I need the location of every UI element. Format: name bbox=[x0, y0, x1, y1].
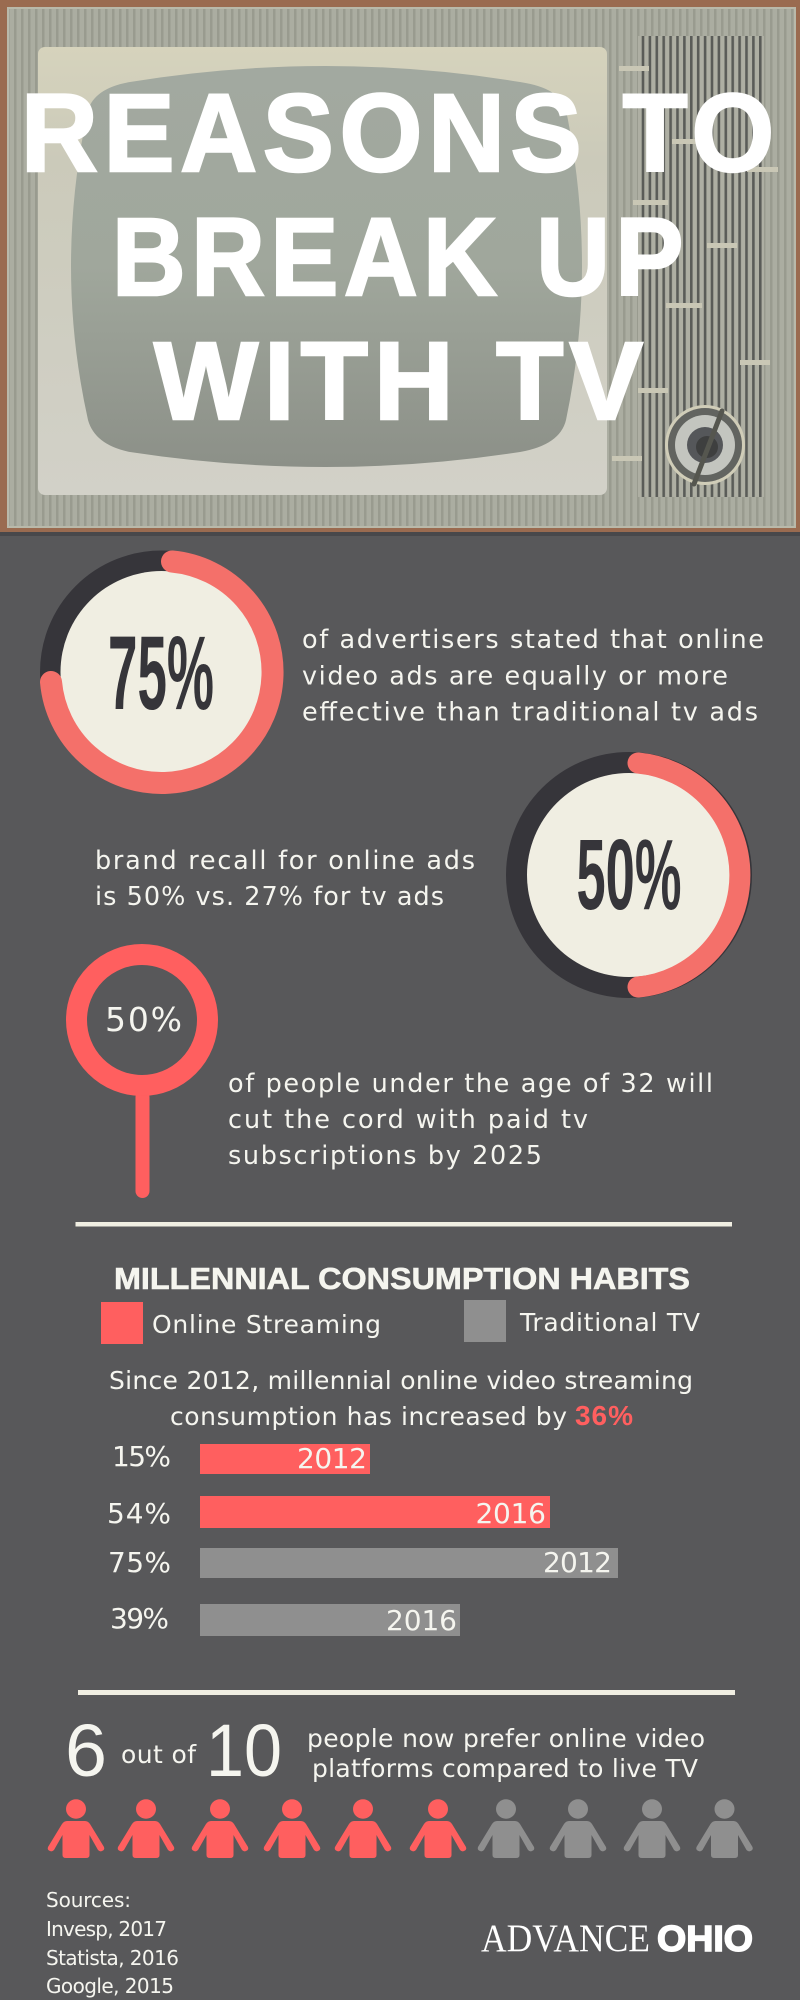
legend: Online Streaming bbox=[152, 1310, 381, 1339]
headline: 6 out of 10 bbox=[65, 1709, 282, 1792]
sources: Sources: bbox=[46, 1888, 131, 1912]
legend: Traditional TV bbox=[519, 1308, 700, 1337]
sources: Invesp, 2017 bbox=[46, 1917, 167, 1941]
donut chart: 50% bbox=[516, 762, 742, 988]
text: prefer online video: people now prefer online video bbox=[307, 1724, 705, 1753]
bar chart: 2016 bbox=[476, 1497, 546, 1530]
text: since 2012: Since 2012, millennial online video streaming bbox=[109, 1366, 693, 1395]
text: advertisers: effective than traditional tv ads bbox=[302, 698, 758, 728]
text: brand recall: is 50% vs. 27% for tv ads bbox=[95, 882, 444, 912]
stat: 75% of advertisers bbox=[50, 561, 764, 783]
icon: pin with 50% bbox=[76, 954, 208, 1198]
text: cut the cord: cut the cord with paid tv bbox=[228, 1105, 588, 1135]
title: BREAK UP bbox=[112, 196, 689, 319]
bar chart: 75% bbox=[108, 1546, 171, 1579]
bar chart: 2016 bbox=[386, 1604, 457, 1637]
text: prefer online video bbox=[307, 1724, 705, 1783]
text: brand recall bbox=[95, 846, 475, 912]
bar chart bbox=[107, 1440, 618, 1637]
donut chart: 50%: 50% bbox=[576, 819, 682, 931]
text: since 2012 bbox=[109, 1366, 693, 1431]
title bbox=[21, 72, 780, 443]
text: advertisers: video ads are equally or more bbox=[302, 662, 728, 692]
text: cut the cord bbox=[228, 1069, 713, 1171]
pictogram: people bbox=[48, 1799, 753, 1858]
text: advertisers bbox=[302, 625, 764, 728]
bar chart: 39% bbox=[110, 1602, 169, 1635]
sources bbox=[46, 1888, 179, 1998]
bar chart: 15% bbox=[112, 1440, 171, 1473]
legend bbox=[101, 1300, 700, 1344]
text: advertisers: of advertisers stated that online bbox=[302, 625, 764, 655]
icon: tuning knob bbox=[665, 405, 745, 485]
text: cut the cord: of people under the age of 32 will bbox=[228, 1069, 713, 1099]
headline: 6 out of 10: out of bbox=[121, 1740, 197, 1769]
donut chart: 75%: 75% bbox=[108, 615, 214, 732]
panel: millennial consumption habits bbox=[101, 1261, 700, 1637]
text: cut the cord: subscriptions by 2025 bbox=[228, 1141, 542, 1171]
text: prefer online video: platforms compared to live TV bbox=[312, 1754, 698, 1783]
logo: Advance Ohio: OHIO bbox=[657, 1918, 753, 1959]
television illustration bbox=[0, 0, 800, 536]
text: since 2012: consumption has increased by bbox=[170, 1402, 567, 1431]
logo: Advance Ohio: ADVANCE bbox=[481, 1917, 650, 1960]
icon: pin with 50%: 50% bbox=[105, 1000, 182, 1039]
title: WITH TV bbox=[154, 320, 649, 443]
title: REASONS TO bbox=[21, 72, 780, 195]
bar chart: 2012 bbox=[297, 1442, 367, 1475]
logo: Advance Ohio bbox=[481, 1917, 753, 1960]
sources: Statista, 2016 bbox=[46, 1946, 179, 1970]
stat: 50% cut the cord bbox=[76, 954, 713, 1198]
bar chart: 54% bbox=[107, 1497, 171, 1530]
header panel bbox=[0, 0, 800, 536]
text: brand recall: brand recall for online ads bbox=[95, 846, 475, 876]
stat: 50% brand recall bbox=[95, 762, 742, 988]
donut chart: 75% bbox=[50, 561, 273, 783]
bar chart: 2012 bbox=[543, 1546, 612, 1579]
headline: 6 out of 10: 10 bbox=[206, 1709, 282, 1792]
panel: 6 out of 10 bbox=[48, 1709, 753, 1858]
headline: 6 out of 10: 6 bbox=[65, 1709, 107, 1792]
sources: Google, 2015 bbox=[46, 1974, 174, 1998]
heading: MILLENNIAL CONSUMPTION HABITS bbox=[114, 1261, 690, 1296]
text: since 2012: 36% bbox=[575, 1400, 633, 1431]
